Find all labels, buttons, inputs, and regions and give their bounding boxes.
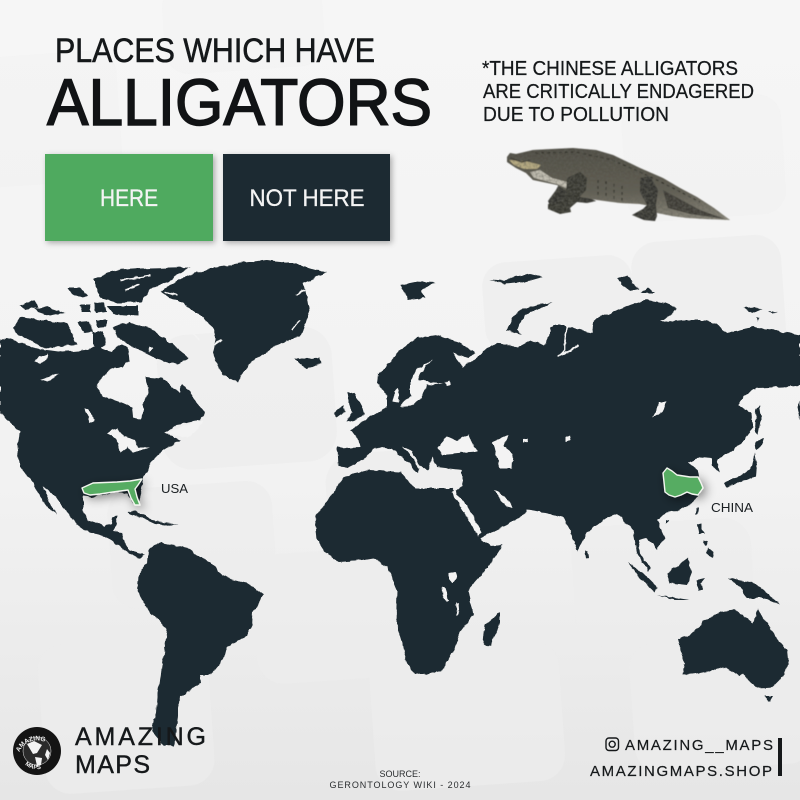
note about Chinese alligators: DUE TO POLLUTION bbox=[483, 104, 669, 126]
label: China: CHINA bbox=[711, 500, 753, 515]
title: alligators: ALLIGATORS bbox=[47, 65, 432, 139]
background bbox=[0, 673, 800, 800]
world map bbox=[0, 260, 800, 745]
map: Eurasia bbox=[337, 300, 800, 572]
source: GERONTOLOGY WIKI - 2024 bbox=[330, 780, 470, 790]
note about Chinese alligators bbox=[482, 58, 754, 126]
legend: here bbox=[45, 154, 213, 241]
note about Chinese alligators: ARE CRITICALLY ENDAGERED bbox=[483, 81, 754, 103]
brand name: MAPS bbox=[75, 751, 150, 779]
map: South America bbox=[137, 543, 263, 745]
brand name: AMAZING bbox=[75, 723, 206, 751]
logo: Amazing Maps globe: MAPS bbox=[25, 762, 41, 770]
map: Tasmania bbox=[765, 696, 773, 701]
highlight: China alligator range bbox=[663, 468, 703, 497]
map: Caribbean bbox=[127, 511, 178, 525]
map: Arctic channels bbox=[120, 276, 578, 356]
label: USA: USA bbox=[161, 481, 188, 496]
vertical bar bbox=[778, 738, 782, 776]
note about Chinese alligators: *THE CHINESE ALLIGATORS bbox=[482, 58, 738, 80]
map: Africa bbox=[315, 470, 503, 675]
shop url: AMAZINGMAPS.SHOP bbox=[590, 763, 772, 780]
source: SOURCE: bbox=[379, 769, 421, 779]
legend: not here: NOT HERE bbox=[250, 185, 364, 212]
map: Europe and Arctic islands bbox=[295, 274, 800, 647]
map: inland seas and lakes bbox=[35, 347, 667, 616]
map: Greenland bbox=[160, 260, 327, 383]
map: landmasses bbox=[0, 260, 800, 745]
icon: alligator bbox=[507, 148, 730, 221]
icon: instagram bbox=[606, 738, 618, 750]
legend: not here bbox=[223, 154, 390, 241]
legend: here: HERE bbox=[100, 185, 158, 212]
map: Canadian Arctic islands bbox=[13, 267, 190, 365]
logo: Amazing Maps globe bbox=[13, 727, 61, 775]
map: Australia bbox=[678, 608, 788, 688]
highlight: USA alligator range bbox=[82, 479, 142, 505]
source bbox=[330, 769, 470, 790]
logo: Amazing Maps globe: AMAZING bbox=[16, 736, 46, 752]
social handle: AMAZING__MAPS bbox=[625, 737, 773, 754]
brand name bbox=[75, 723, 206, 779]
title: places which have: PLACES WHICH HAVE bbox=[55, 32, 375, 70]
map: Southeast Asia islands bbox=[628, 524, 780, 605]
map: North America bbox=[0, 338, 205, 558]
